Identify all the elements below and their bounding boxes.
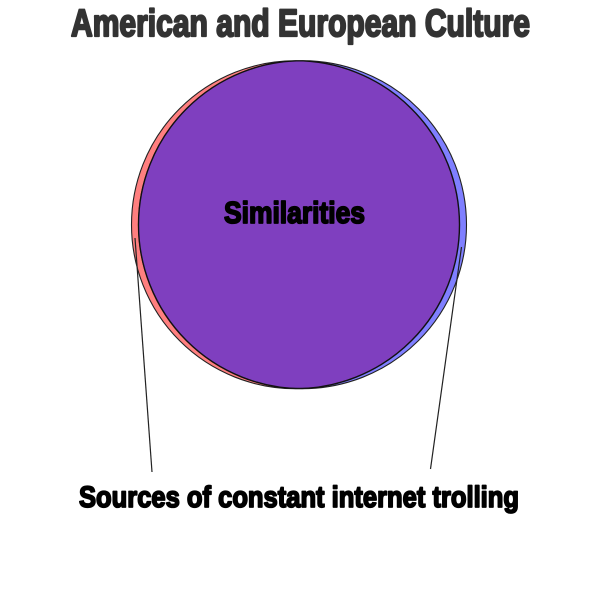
venn infographic [70, 7, 530, 514]
pointer line: right [430, 247, 462, 469]
circle: American culture [132, 61, 460, 389]
label: sources of trolling: Sources of constant internet trolling [79, 481, 519, 514]
overlap outline [292, 60, 460, 389]
venn diagram [132, 61, 466, 389]
pointer line: left [135, 238, 152, 472]
label: similarities: Similarities [224, 195, 365, 230]
circle: European culture [138, 61, 466, 389]
overlap: similarities [138, 61, 466, 389]
